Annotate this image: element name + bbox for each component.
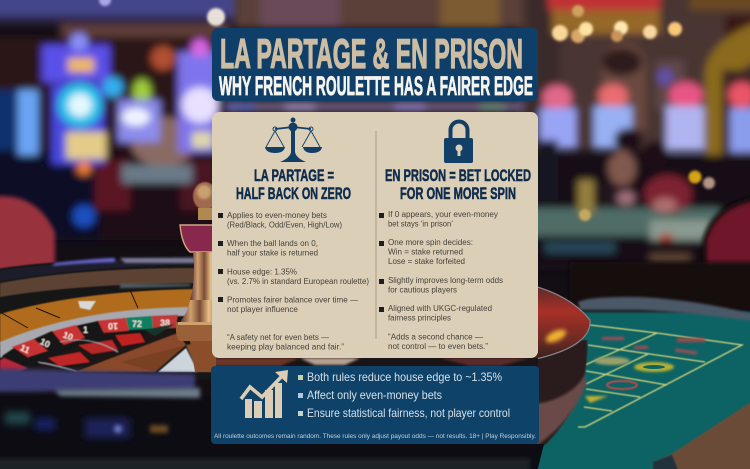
icon: padlock <box>444 122 473 163</box>
background: wheel inner bowl <box>30 324 215 372</box>
icon: rising bar chart with arrow <box>241 370 288 418</box>
bullet list: En Prison: for cautious players <box>388 286 457 294</box>
bullet list: En Prison: fairness principles <box>388 314 451 322</box>
column: La Partage <box>218 118 369 352</box>
bullet list: En Prison: Lose = stake forfeited <box>388 257 465 266</box>
summary bullet list: Ensure statistical fairness, not player control <box>307 406 510 420</box>
background: red chairs <box>0 196 750 308</box>
disclaimer: All roulette outcomes remain random. These rules only adjust payout odds — not results. 18+ | Play Responsibly. <box>214 433 536 440</box>
bullet list: En Prison <box>379 210 503 322</box>
panel: summary <box>211 366 539 444</box>
bullet list: En Prison: Slightly improves long-term odds <box>388 276 503 285</box>
background: chandelier and table lights <box>99 0 715 221</box>
summary bullet list: Both rules reduce house edge to ~1.35% <box>307 370 502 384</box>
bullet list: La Partage: (Red/Black, Odd/Even, High/Low) <box>227 220 342 230</box>
background: wheel number pockets: 10 <box>108 321 118 331</box>
icon: balance scales <box>265 118 322 162</box>
background: blurred slot machines on the left <box>0 0 240 240</box>
background: wheel number pockets: 38 <box>160 318 170 328</box>
summary bullet list <box>298 370 510 420</box>
background: roulette wheel on the left <box>0 254 240 380</box>
bullet list: La Partage: half your stake is returned <box>227 248 318 258</box>
heading: En Prison: EN PRISON = BET LOCKED <box>385 167 531 185</box>
quote: La Partage <box>227 333 344 352</box>
quote: En Prison <box>388 332 488 351</box>
quote: La Partage: keeping play balanced and fair.” <box>227 342 344 352</box>
column: En Prison: FOR ONE MORE SPIN <box>400 185 516 203</box>
summary bullet list: Affect only even-money bets <box>307 388 442 402</box>
bullet list: En Prison: bet stays ‘in prison’ <box>388 220 453 228</box>
quote: En Prison: not control — to even bets.” <box>388 342 488 351</box>
column: La Partage: HALF BACK ON ZERO <box>236 185 351 203</box>
background: roulette table layout on the right <box>530 262 750 469</box>
panel: rule comparison <box>212 112 538 358</box>
background: front rim of the wheel <box>0 358 544 469</box>
bullet list: La Partage: Applies to even-money bets <box>227 211 327 220</box>
bullet list: La Partage: House edge: 1.35% <box>227 268 297 276</box>
background: brass turret of the wheel <box>176 182 217 372</box>
bullet list: En Prison: One more spin decides: <box>388 238 473 247</box>
column: En Prison <box>379 122 531 351</box>
bullet list: La Partage: When the ball lands on 0, <box>227 239 318 248</box>
heading: La Partage: LA PARTAGE = <box>254 167 334 185</box>
background: wheel number pockets: 1 <box>83 325 88 335</box>
quote: La Partage: “A safety net for even bets — <box>227 333 329 342</box>
background: wheel number pockets: 10 <box>38 336 52 350</box>
bullet list: La Partage: Promotes fairer balance over time — <box>227 296 358 304</box>
title banner <box>212 28 538 101</box>
bullet list: En Prison: If 0 appears, your even-money <box>388 210 498 219</box>
bullet list: En Prison: Aligned with UKGC-regulated <box>388 304 492 313</box>
bullet list: La Partage: (vs. 2.7% in standard European roulette) <box>227 277 369 286</box>
background: wheel number pockets: 11 <box>19 343 31 356</box>
background: band between title and panel <box>225 0 525 112</box>
background: blurred arches and lights on the right <box>520 0 750 270</box>
background: wheel number pockets: 72 <box>132 319 142 329</box>
bullet list: La Partage: not player influence <box>227 305 299 314</box>
bullet list: En Prison: Win = stake returned <box>388 248 463 256</box>
background: wheel number pockets: 10 <box>62 330 74 342</box>
quote: En Prison: “Adds a second chance — <box>388 332 483 342</box>
background: wheel number pockets <box>0 315 178 372</box>
background: right side of wheel rim <box>530 285 590 450</box>
bullet list: La Partage <box>218 211 369 314</box>
